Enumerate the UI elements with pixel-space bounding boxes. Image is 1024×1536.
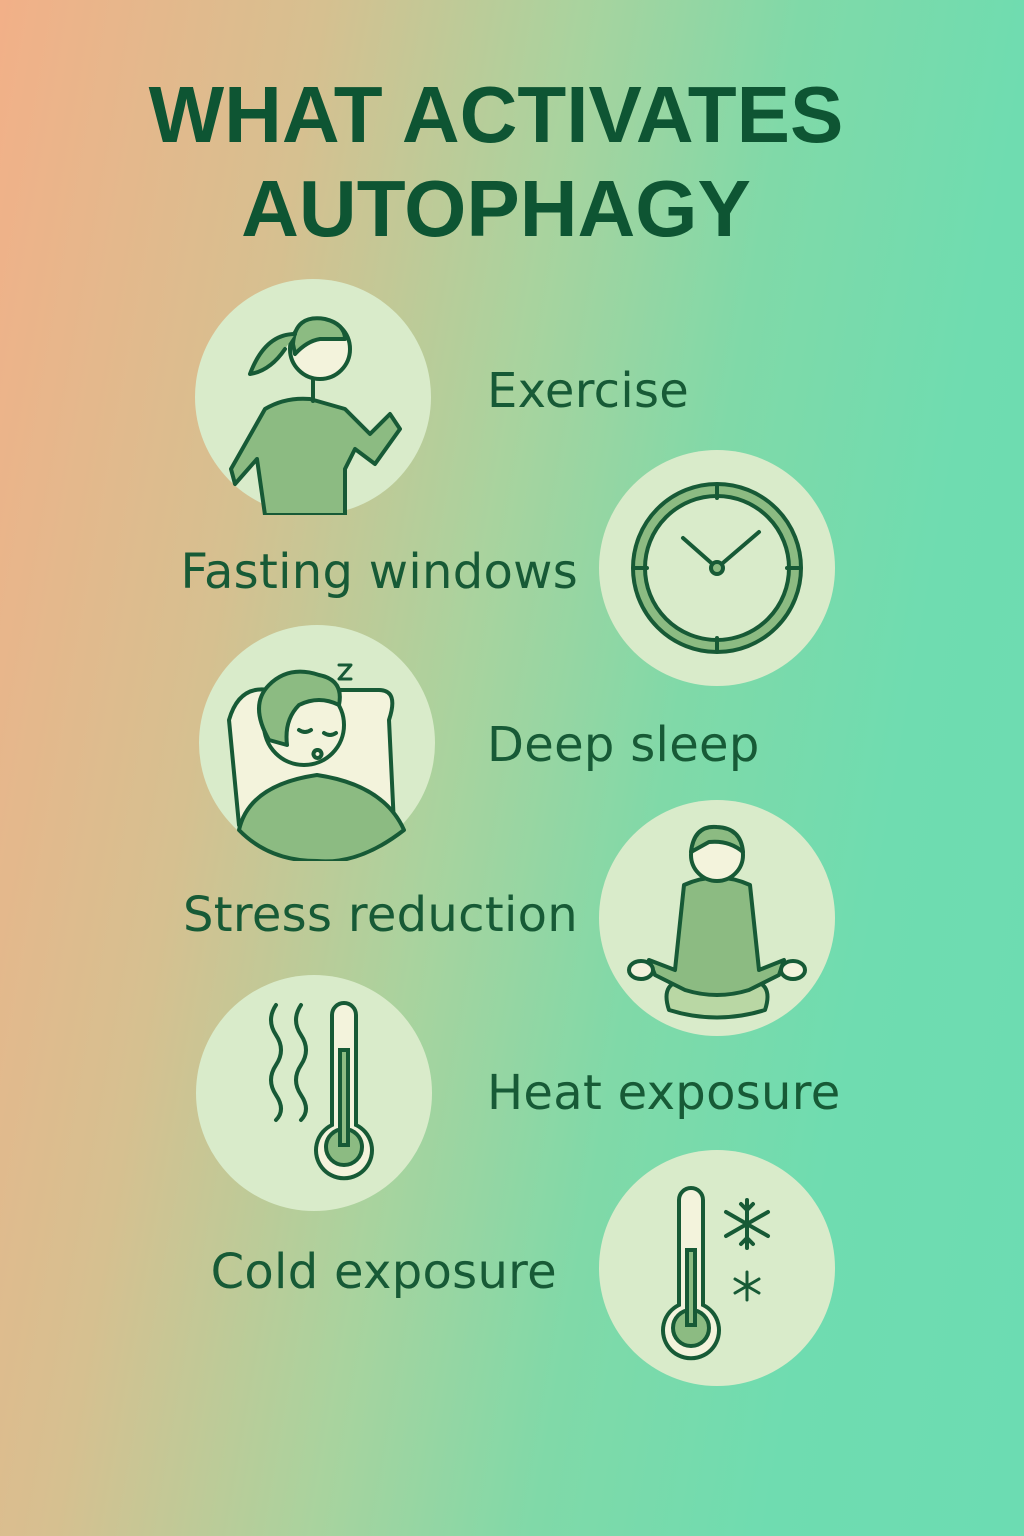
label: heat exposure: Heat exposure xyxy=(487,1065,841,1121)
label: stress reduction: Stress reduction xyxy=(183,887,578,943)
title: WHAT ACTIVATES xyxy=(149,70,843,159)
icon: clock xyxy=(599,450,835,686)
icon: meditation xyxy=(599,800,835,1036)
label: fasting windows: Fasting windows xyxy=(180,544,578,600)
title: AUTOPHAGY xyxy=(241,164,751,253)
label: exercise: Exercise xyxy=(487,363,689,419)
icon: heat thermometer xyxy=(196,975,432,1211)
icon: deep sleep xyxy=(199,625,435,861)
label: deep sleep: Deep sleep xyxy=(487,717,760,773)
icon: cold thermometer xyxy=(599,1150,835,1386)
icon: exercise runner xyxy=(195,279,431,515)
label: cold exposure: Cold exposure xyxy=(211,1244,557,1300)
title xyxy=(148,70,843,253)
